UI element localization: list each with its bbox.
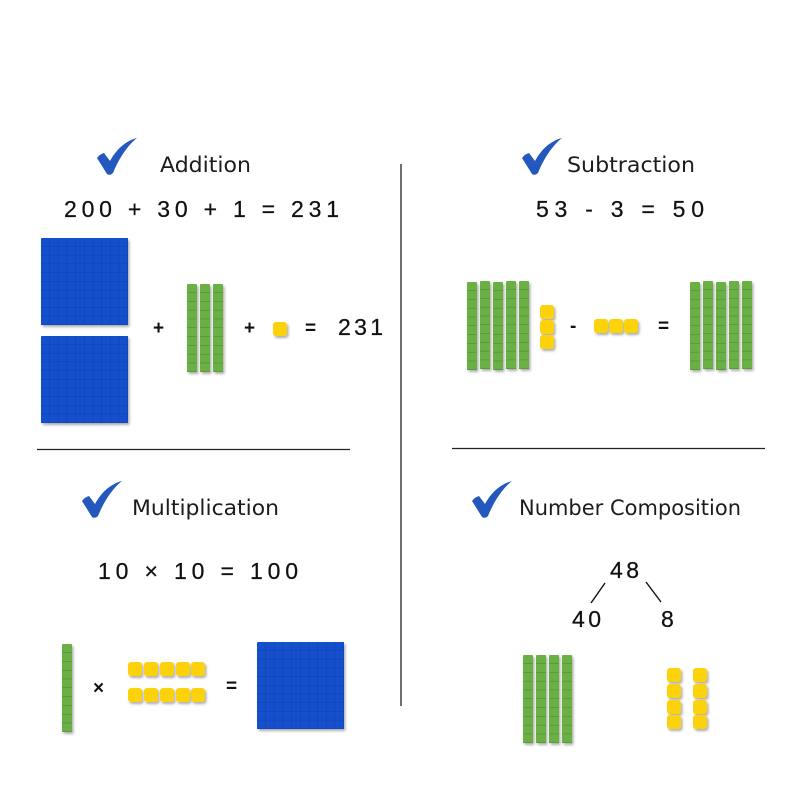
blocks: three unit cubes vertical (540, 305, 554, 349)
icon: multiplication check mark (82, 481, 122, 518)
number: 40: 40 (572, 606, 601, 632)
branch: left (591, 583, 605, 603)
icon: subtraction check mark (522, 138, 562, 175)
number: 8: 8 (661, 606, 674, 632)
blocks: five tens rods result (690, 281, 752, 370)
panel: addition (41, 138, 383, 423)
panel: subtraction (467, 138, 752, 370)
divider: left horizontal (37, 448, 350, 450)
equation: addition: 200 + 30 + 1 = 231 (64, 196, 339, 222)
operator: plus: + (244, 318, 255, 339)
heading: addition: Addition (160, 153, 251, 177)
blocks: two hundreds flats (41, 238, 128, 423)
operator: plus: + (153, 318, 164, 339)
blocks: three unit cubes horizontal (594, 319, 638, 333)
operator: equals: = (226, 676, 237, 697)
result: 231: 231 (338, 314, 383, 340)
operator: equals: = (305, 318, 316, 339)
blocks: eight unit cubes (667, 668, 707, 729)
block: one tens rod (62, 644, 72, 732)
operator: times: × (93, 678, 104, 699)
blocks: ten unit cubes (128, 662, 205, 702)
operator: equals: = (658, 316, 669, 337)
heading: multiplication: Multiplication (132, 496, 279, 520)
panel: number composition (472, 481, 741, 743)
block: hundreds flat (257, 642, 344, 729)
icon: addition check mark (97, 138, 137, 175)
branch: right (646, 582, 661, 602)
icon: composition check mark (472, 481, 512, 518)
operator: minus: - (570, 316, 576, 337)
equation: subtraction: 53 - 3 = 50 (536, 196, 704, 222)
blocks: five tens rods (467, 281, 529, 370)
equation: multiplication: 10 × 10 = 100 (98, 558, 298, 584)
divider: vertical (400, 164, 402, 706)
heading: number composition: Number Composition (519, 496, 741, 520)
divider: right horizontal (452, 448, 765, 450)
panel: multiplication (62, 481, 344, 732)
blocks: four tens rods (523, 655, 572, 743)
number: 48: 48 (610, 557, 639, 583)
heading: subtraction: Subtraction (567, 153, 695, 177)
blocks: three tens rods (187, 284, 223, 372)
block: one unit cube (273, 322, 287, 336)
